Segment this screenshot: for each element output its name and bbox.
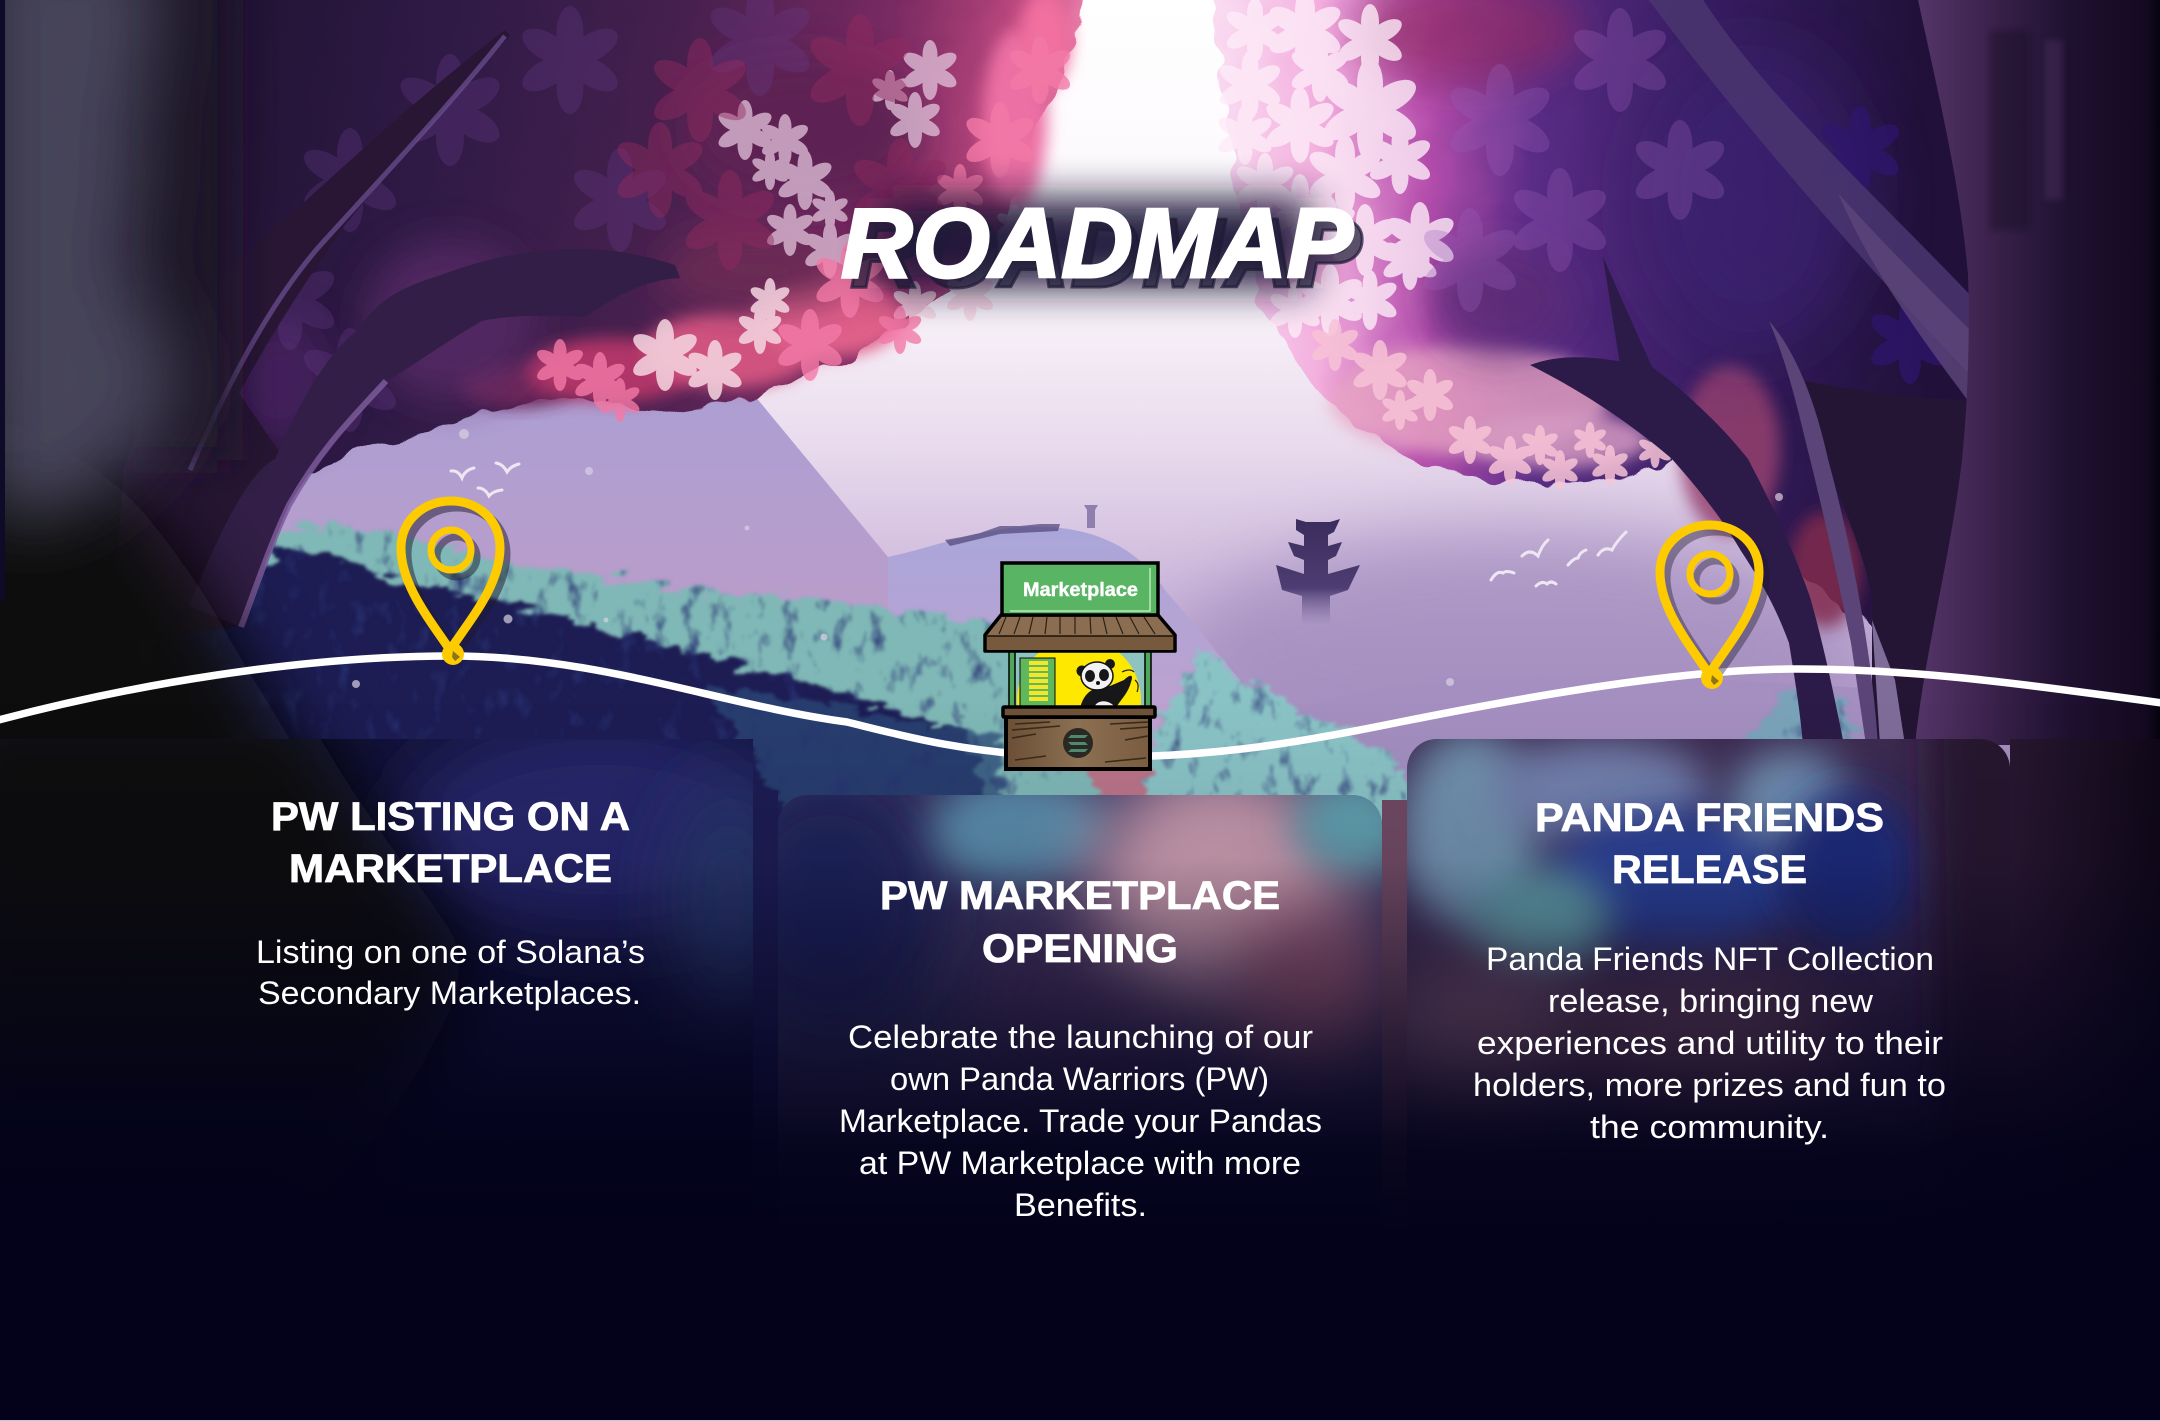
right ground — [1190, 677, 1960, 800]
heading: PANDA FRIENDS — [1535, 796, 1884, 840]
body — [1473, 941, 1946, 1145]
far right backdrop — [2010, 739, 2160, 1421]
counter and base — [1003, 707, 1155, 769]
panel: right friends backdrop — [1407, 739, 2010, 1159]
title: ROADMAP — [850, 198, 1363, 308]
pink path — [1000, 760, 1400, 1030]
text block: panda friends — [1473, 796, 1946, 1145]
left grass hill — [130, 523, 1100, 830]
map pin: friends — [1660, 525, 1765, 689]
booth window — [1008, 652, 1152, 706]
heading: MARKETPLACE — [289, 847, 612, 891]
birds — [451, 463, 1626, 586]
marketplace booth — [985, 563, 1175, 769]
right tree flowers — [1215, 0, 1954, 490]
left foreground shadow — [0, 400, 470, 1421]
right grass — [1140, 650, 1860, 830]
panda mascot — [1076, 659, 1138, 708]
body — [839, 1019, 1322, 1223]
panel: left listing backdrop — [4, 739, 753, 1149]
body: Secondary Marketplaces. — [258, 975, 641, 1011]
body: Panda Friends NFT Collection — [1486, 941, 1934, 977]
mountain — [230, 370, 888, 680]
right tree trunks — [1530, 0, 2160, 745]
heading — [271, 795, 630, 891]
body: holders, more prizes and fun to — [1473, 1067, 1946, 1103]
menu board — [1020, 658, 1055, 707]
body: Listing on one of Solana’s — [256, 934, 645, 970]
body: Celebrate the launching of our — [848, 1019, 1313, 1055]
heading — [880, 874, 1280, 971]
panel: centre marketplace backdrop — [778, 795, 1382, 1138]
pagoda silhouette — [1276, 519, 1360, 625]
text block: listing — [256, 795, 645, 1011]
body: at PW Marketplace with more — [859, 1145, 1301, 1181]
bottom fade — [0, 700, 2160, 1421]
body: Benefits. — [1014, 1187, 1147, 1223]
left canopy edge shadow — [120, 0, 230, 460]
large right trunk — [1915, 0, 2160, 745]
distant hill with tower — [888, 505, 1240, 760]
market sign — [1002, 563, 1158, 615]
top-left grey haze — [0, 0, 174, 520]
heading: PW LISTING ON A — [271, 795, 630, 839]
frosted panels — [4, 739, 2160, 1164]
roof — [985, 615, 1175, 651]
body: experiences and utility to their — [1477, 1025, 1943, 1061]
body: own Panda Warriors (PW) — [890, 1061, 1269, 1097]
route line — [0, 656, 2160, 757]
left tree flowers — [240, 0, 1074, 432]
body: Marketplace. Trade your Pandas — [839, 1103, 1322, 1139]
title: ROADMAP — [841, 188, 1354, 298]
heading: OPENING — [982, 927, 1178, 971]
solana logo — [1063, 728, 1093, 758]
map pin: listing — [401, 501, 506, 665]
heading — [1535, 796, 1884, 892]
market sign: Marketplace — [1023, 580, 1138, 601]
heading: RELEASE — [1612, 848, 1807, 892]
text block: marketplace opening — [839, 874, 1322, 1223]
body: release, bringing new — [1548, 983, 1874, 1019]
firefly dots — [352, 429, 1783, 700]
right tree canopy — [1218, 0, 2000, 700]
body — [256, 934, 645, 1011]
heading: PW MARKETPLACE — [880, 874, 1280, 918]
left tree trunks — [110, 30, 680, 645]
body: the community. — [1590, 1109, 1829, 1145]
left tree canopy — [175, 0, 1095, 475]
